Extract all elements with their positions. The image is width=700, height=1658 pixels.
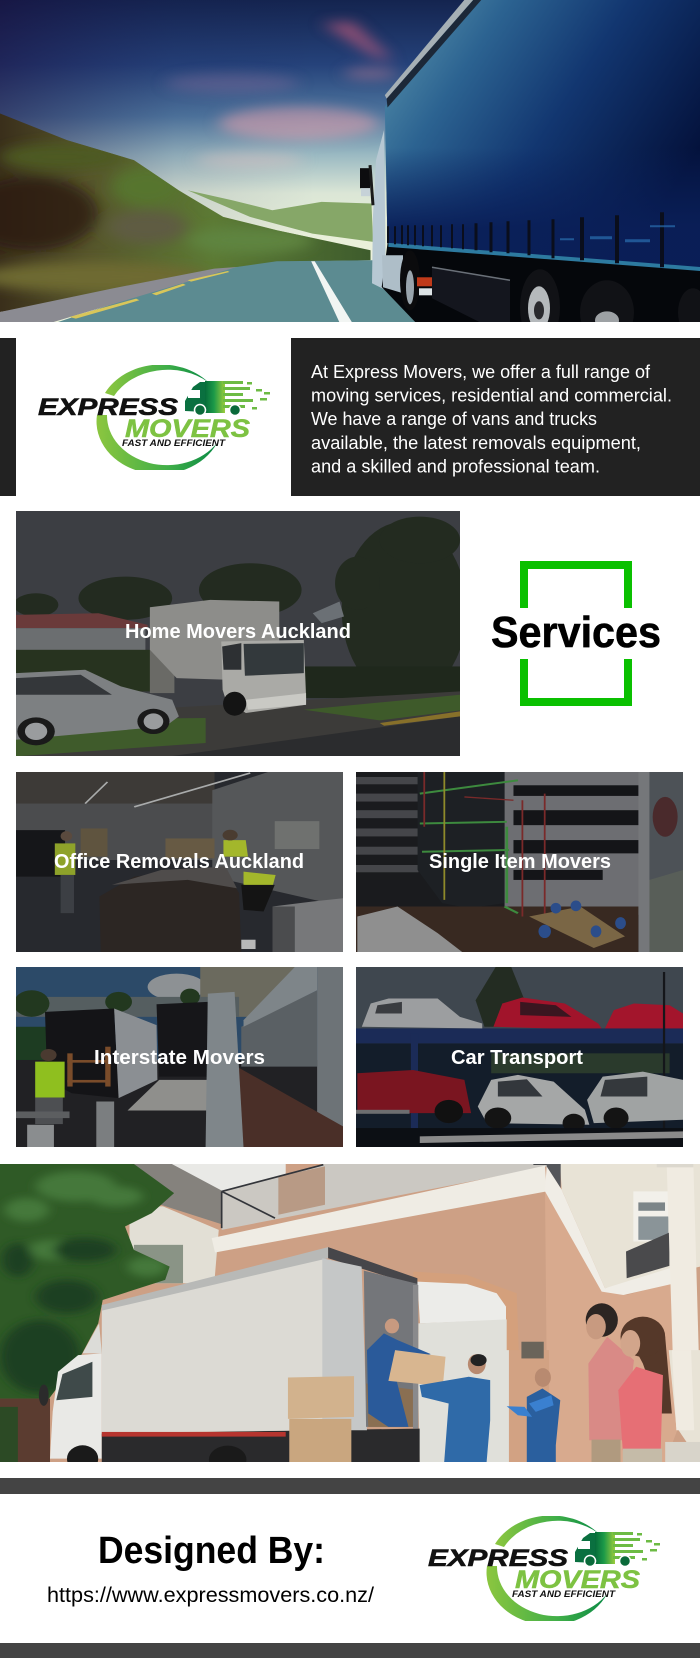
- footer logo: Express Movers: [428, 1516, 660, 1621]
- hero photo: truck on a mountain road: [0, 0, 700, 1143]
- truck box: [102, 1247, 418, 1437]
- label: Office Removals Auckland: [54, 851, 304, 873]
- brick fence: [0, 1399, 50, 1462]
- photo: office move: [16, 772, 343, 952]
- sky and left roof: [121, 1164, 286, 1283]
- panel: Interstate Movers: [16, 967, 343, 1147]
- label: Home Movers Auckland: [125, 621, 351, 643]
- truck chassis: [102, 1429, 420, 1462]
- logo wordmark: FAST AND EFFICIENT: [512, 1589, 616, 1600]
- footer top bar: [0, 1478, 700, 1494]
- siding: [560, 1164, 700, 1288]
- truck cab: [39, 1323, 102, 1459]
- logo wordmark: EXPRESS: [38, 394, 178, 421]
- garage arch: [413, 1272, 519, 1367]
- label: Interstate Movers: [94, 1047, 265, 1069]
- left hillside: [0, 110, 379, 324]
- logo truck: [575, 1532, 660, 1566]
- worker in the truck: [367, 1319, 431, 1427]
- worker with clipboard: [507, 1368, 560, 1462]
- panel: Home Movers Auckland: [16, 511, 460, 756]
- label: Single Item Movers: [429, 851, 611, 873]
- truck wheels and side skirt: [382, 250, 700, 345]
- worker on the ground: [420, 1354, 490, 1462]
- house upper storey, traced in finer coordinates: [212, 1164, 700, 1373]
- road: [58, 260, 415, 322]
- website url: https://www.expressmovers.co.nz/: [47, 1584, 374, 1607]
- footer credit text: [47, 1530, 374, 1607]
- logo ring: [487, 1515, 607, 1625]
- logo wordmark: MOVERS: [125, 415, 250, 443]
- logo wordmark: MOVERS: [515, 1566, 640, 1594]
- photo: moving truck in a driveway: [16, 516, 460, 756]
- footer bottom bar: [0, 1643, 700, 1658]
- lower brick and garage door: [417, 1350, 700, 1462]
- photo: strapped load in a truck: [356, 772, 683, 952]
- panel: Office Removals Auckland: [16, 772, 343, 952]
- curtain hooks: [388, 212, 662, 267]
- logo wordmark: EXPRESS: [428, 1545, 568, 1572]
- truck wheels: [67, 1445, 246, 1474]
- intro text panel: and a skilled and professional team.: [311, 456, 600, 476]
- intro text panel: [291, 338, 700, 496]
- wall lamp: [521, 1342, 544, 1358]
- logo ring: [97, 364, 217, 474]
- logo: Express Movers: [38, 365, 270, 470]
- photo: loading outside a building: [16, 967, 343, 1147]
- panel: Car Transport: [356, 967, 683, 1147]
- distant hills: [188, 190, 373, 242]
- logo truck: [185, 381, 270, 416]
- pink clouds: [165, 22, 397, 169]
- bottom photo: movers unloading a truck at a house: [0, 1164, 700, 1462]
- logo wordmark: [428, 1545, 640, 1600]
- white cornice: [212, 1164, 675, 1295]
- tree: [0, 1164, 179, 1401]
- cardboard boxes: [288, 1376, 354, 1462]
- side brick wall: [545, 1191, 675, 1367]
- balustrade: [222, 1164, 548, 1230]
- trailer curtain: [385, 0, 700, 271]
- left dark bar: [0, 338, 16, 496]
- heading: Services bracket: [491, 561, 661, 706]
- logo wordmark: FAST AND EFFICIENT: [122, 438, 226, 449]
- label: Car Transport: [451, 1047, 583, 1069]
- logo wordmark: [38, 394, 250, 449]
- window: [633, 1191, 668, 1242]
- intro text panel: moving services, residential and commercial.: [311, 386, 672, 406]
- intro text panel: At Express Movers, we offer a full range of: [311, 362, 651, 382]
- panel: Single Item Movers: [356, 772, 683, 952]
- yellow road line: [69, 271, 229, 319]
- road shoulder: [0, 267, 237, 322]
- side balcony: [626, 1232, 669, 1278]
- sky: [0, 0, 700, 322]
- intro text panel: available, the latest removals equipment,: [311, 433, 641, 453]
- couple: [586, 1303, 672, 1462]
- intro text panel: We have a range of vans and trucks: [311, 409, 597, 429]
- green bracket: [520, 561, 632, 706]
- curtain reflections: [560, 225, 675, 242]
- truck cab: [360, 130, 386, 290]
- box being handed over: [388, 1350, 446, 1386]
- column: [657, 1164, 699, 1373]
- photo: car carrier: [356, 967, 683, 1143]
- Designed By heading: Designed By:: [98, 1530, 325, 1572]
- white road line: [311, 261, 352, 322]
- trailer chassis: [382, 244, 700, 322]
